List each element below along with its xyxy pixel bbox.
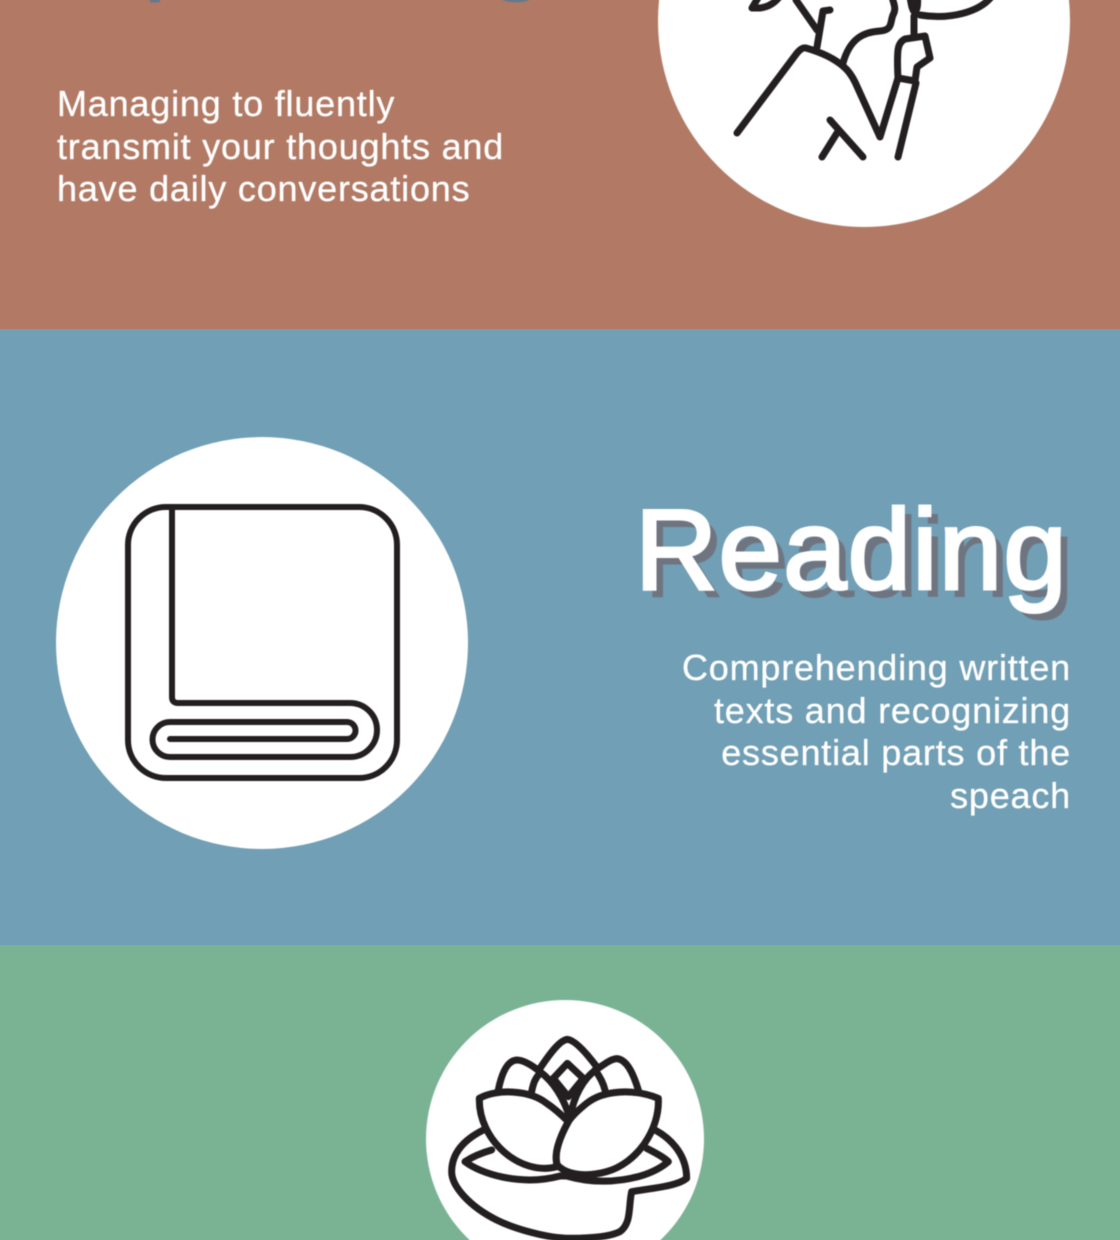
text: reading description [682, 647, 1071, 816]
icon: person in white circle [657, 0, 1071, 228]
icon: book in white circle [55, 436, 469, 850]
text: speaking description [56, 83, 504, 210]
text: reading description: texts and recognizing [714, 690, 1071, 731]
heading: reading: Reading [635, 487, 1068, 614]
text: reading description: essential parts of the [721, 732, 1071, 773]
panel: reading [0, 329, 1120, 945]
text: reading description: speach [950, 775, 1071, 816]
text: reading description: Comprehending written [682, 647, 1071, 688]
icon: lotus in white circle [425, 999, 705, 1240]
text: speaking description: Managing to fluently [57, 83, 395, 124]
text: speaking description: transmit your thoughts and [57, 126, 504, 167]
text: speaking description: have daily conversations [57, 168, 470, 209]
panel: lotus section [0, 945, 1120, 1240]
panel: speaking [0, 0, 1120, 329]
